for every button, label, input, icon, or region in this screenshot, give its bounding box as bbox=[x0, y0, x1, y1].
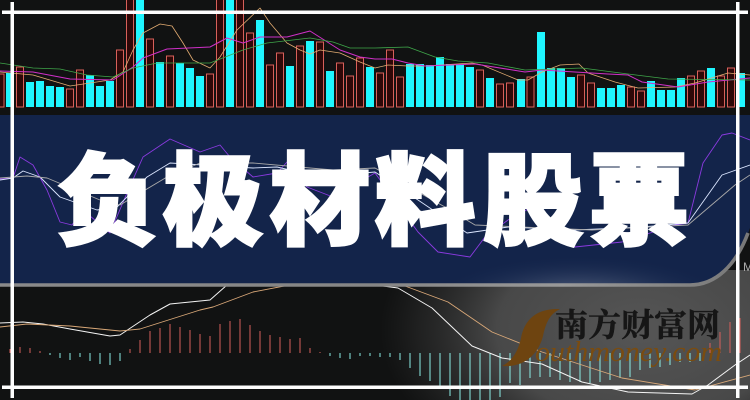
purple oscillator line bbox=[0, 133, 750, 257]
MACD lines bbox=[0, 275, 750, 394]
tan average line bbox=[0, 8, 750, 88]
MACD histogram bbox=[10, 318, 740, 400]
green average line bbox=[0, 38, 750, 80]
white MACD line bbox=[0, 275, 750, 394]
glow over lower chart bbox=[380, 270, 750, 400]
cyan volume bars bbox=[6, 0, 745, 107]
gray oscillator line bbox=[0, 163, 750, 230]
cyan histogram bars bbox=[50, 353, 700, 400]
volume bar chart bbox=[0, 0, 745, 107]
panel oscillator lines bbox=[0, 133, 750, 257]
moving average lines bbox=[0, 8, 750, 88]
Southmoney watermark bbox=[502, 300, 722, 368]
watermark Chinese name: 南方财富网 bbox=[555, 300, 720, 346]
pale blue oscillator line bbox=[0, 163, 750, 233]
title text: 负极材料股票 bbox=[58, 121, 689, 266]
navy title panel bbox=[0, 115, 750, 285]
red histogram bars bbox=[10, 318, 740, 353]
red volume bars bbox=[0, 0, 734, 107]
watermark domain: outhmoney.com bbox=[535, 336, 722, 368]
tan MACD line bbox=[0, 283, 750, 390]
watermark swoosh S bbox=[502, 309, 560, 366]
magenta average line bbox=[0, 31, 750, 87]
